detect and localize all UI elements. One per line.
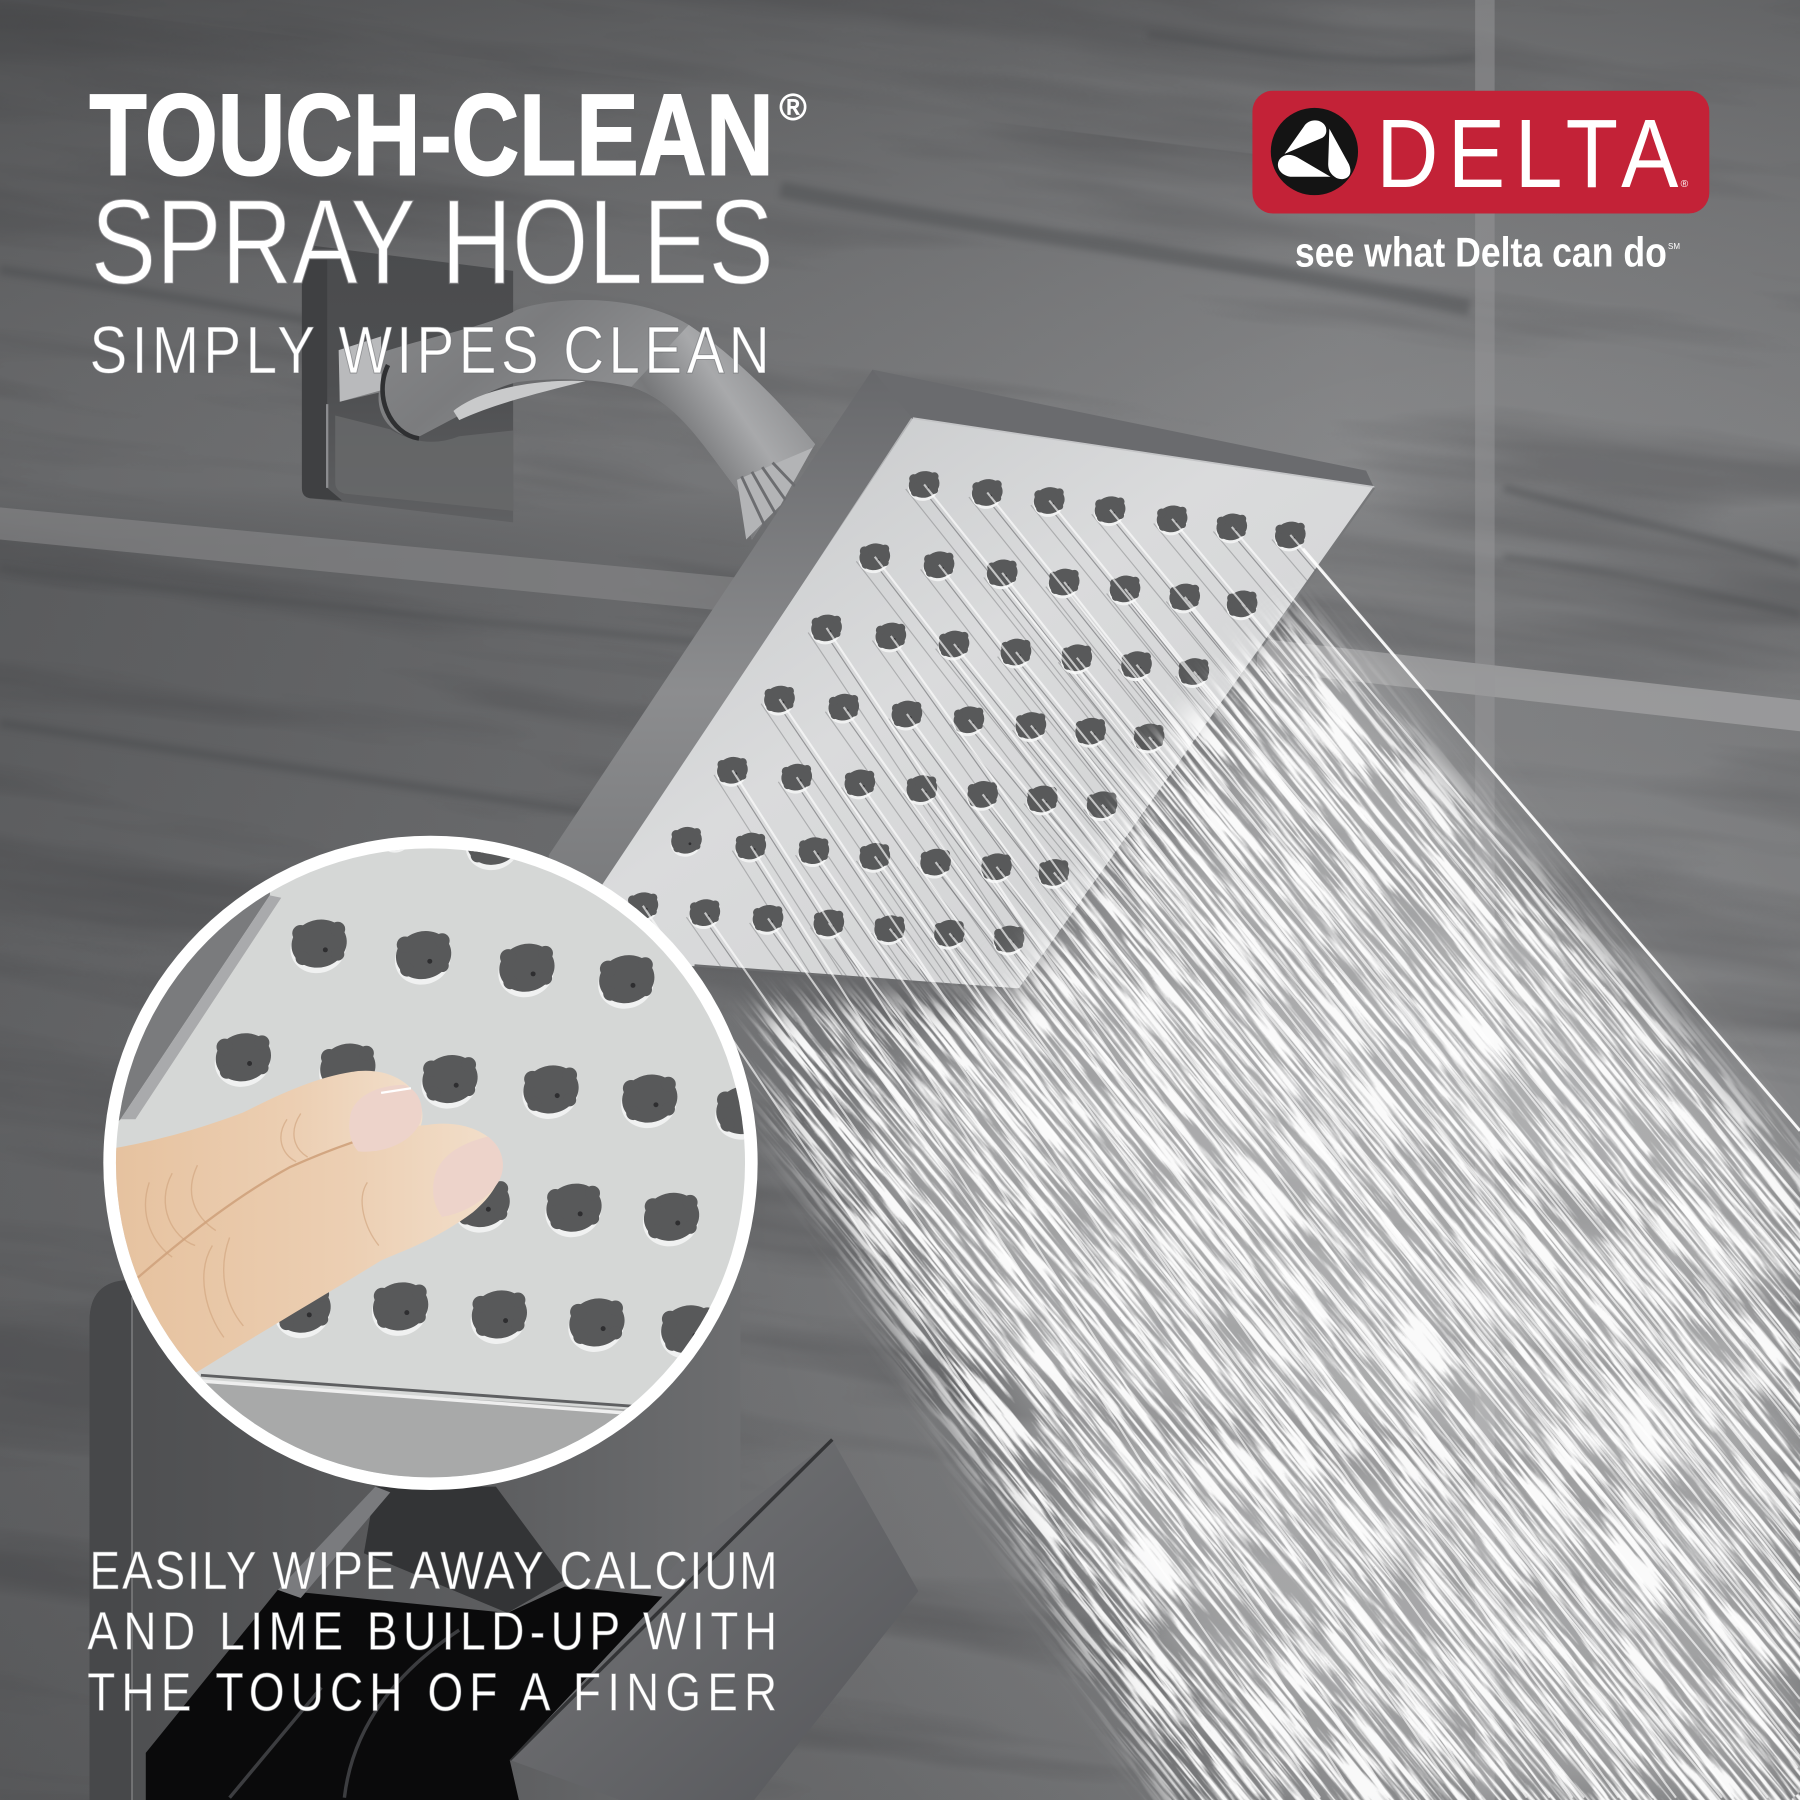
flange reflection bbox=[339, 336, 381, 402]
registered mark: ® bbox=[1681, 179, 1689, 190]
service mark: SM bbox=[1668, 242, 1680, 251]
plate reflection bbox=[335, 416, 513, 511]
valve trim and handle bbox=[90, 1280, 918, 1800]
water spray bbox=[642, 484, 1800, 1800]
white ring bbox=[103, 836, 758, 1490]
arm highlight bbox=[453, 381, 585, 420]
wall plate bbox=[302, 246, 513, 522]
lower finger bbox=[138, 1124, 498, 1372]
Delta logo bbox=[1252, 91, 1709, 275]
arm end segment bbox=[631, 325, 815, 540]
arm threads bbox=[737, 448, 813, 540]
side frame bbox=[549, 370, 913, 956]
shower head bbox=[548, 370, 1375, 988]
water trails on face bbox=[686, 488, 1316, 988]
spray face bbox=[554, 419, 1374, 990]
flange bbox=[383, 365, 419, 439]
heading: Spray Holes: SPRAY HOLES bbox=[91, 175, 774, 310]
enlarged spray holes bbox=[214, 850, 744, 1358]
shower arm bbox=[340, 300, 815, 540]
heading: Touch-Clean: TOUCH-CLEAN bbox=[90, 71, 774, 199]
body text: EASILY WIPE AWAY CALCIUM bbox=[90, 1540, 777, 1601]
upper finger bbox=[115, 1071, 422, 1286]
wall plate and shower arm bbox=[302, 246, 815, 540]
wordmark: DELTA bbox=[1376, 100, 1679, 208]
finger wrinkles bbox=[146, 1114, 379, 1337]
handle blade bbox=[510, 1440, 918, 1800]
head frame edge bbox=[118, 892, 270, 1121]
handle hub bbox=[364, 1487, 565, 1613]
registered mark: ® bbox=[779, 86, 807, 127]
body text: AND LIME BUILD-UP WITH bbox=[87, 1601, 777, 1661]
fingernails bbox=[349, 1085, 422, 1152]
body text: THE TOUCH OF A FINGER bbox=[87, 1662, 777, 1722]
emblem bbox=[1271, 108, 1358, 195]
chrome face bbox=[103, 838, 758, 1492]
magnified circle inset bbox=[103, 812, 777, 1492]
red badge bbox=[1252, 91, 1709, 214]
body text bbox=[87, 1540, 777, 1722]
handle dark body bbox=[146, 1586, 662, 1800]
spray holes bbox=[624, 468, 1309, 959]
subheading: SIMPLY WIPES CLEAN bbox=[90, 314, 770, 388]
lower wall band bbox=[206, 1382, 626, 1478]
trim plate bbox=[90, 1280, 740, 1800]
outermost water jet bbox=[1303, 549, 1800, 1131]
tagline: see what Delta can do bbox=[1295, 229, 1667, 275]
top frame bbox=[872, 370, 1374, 488]
